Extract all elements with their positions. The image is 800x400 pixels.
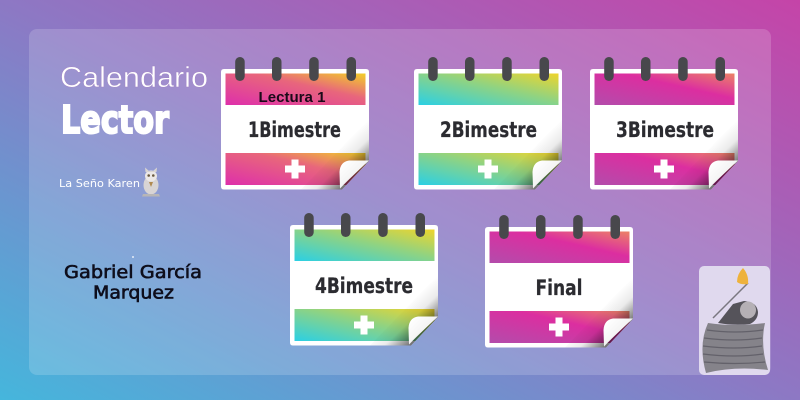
top band	[294, 230, 434, 261]
page curl	[532, 160, 562, 188]
page curl shadow	[565, 277, 633, 348]
binding rings	[235, 57, 356, 81]
name line 1: Gabriel García	[64, 263, 202, 283]
reader figure	[718, 301, 758, 325]
page curl shadow	[494, 119, 562, 190]
icon: owl	[142, 168, 160, 196]
page	[221, 69, 369, 190]
calendar: 4Bimestre	[290, 213, 438, 346]
author name: Gabriel García Marquez	[64, 263, 202, 304]
page curl	[708, 160, 738, 188]
credit text: La Seño Karen	[59, 178, 140, 190]
bottom band	[594, 153, 734, 185]
heading line: Lector: Lector	[61, 98, 169, 142]
icon: plus	[478, 160, 498, 178]
illustration card: reader inside book with butterfly	[699, 266, 770, 375]
label: 1Bimestre: 1Bimestre	[248, 118, 341, 143]
binding rings	[304, 213, 425, 237]
page	[414, 69, 562, 190]
page curl shadow	[670, 119, 738, 190]
page curl	[604, 318, 633, 346]
author credit with owl	[59, 168, 160, 196]
top band	[490, 232, 630, 263]
top band	[418, 74, 558, 105]
page	[590, 69, 738, 190]
bottom band	[294, 309, 434, 341]
page curl	[340, 160, 369, 188]
name line 2: Marquez	[93, 284, 174, 304]
label: Final: Final	[536, 276, 582, 301]
page curl shadow	[370, 275, 438, 346]
bottom band	[490, 311, 630, 343]
butterfly	[737, 268, 748, 284]
calendar: Final	[485, 215, 633, 348]
top band	[226, 74, 366, 105]
bottom band	[226, 153, 366, 185]
bottom band	[418, 153, 558, 185]
heading line: Calendario: Calendario	[60, 62, 208, 94]
binding rings	[604, 57, 725, 81]
calendar: 3Bimestre	[590, 57, 738, 190]
top band	[594, 74, 734, 105]
band label: Lectura 1: Lectura 1	[258, 90, 326, 106]
page	[290, 225, 438, 346]
page	[485, 227, 633, 348]
decorative dot	[132, 256, 134, 258]
card background	[699, 266, 770, 375]
page curl	[408, 316, 438, 344]
page curl shadow	[301, 119, 369, 190]
calendar: 2Bimestre	[414, 57, 562, 190]
icon: plus	[285, 160, 305, 178]
icon: plus	[549, 318, 569, 336]
binding rings	[428, 57, 549, 81]
binding rings	[499, 215, 620, 239]
heading: Calendario Lector	[60, 62, 208, 142]
fishing rod	[713, 283, 748, 318]
label: 3Bimestre: 3Bimestre	[616, 118, 714, 143]
label: 4Bimestre: 4Bimestre	[315, 274, 413, 299]
icon: plus	[354, 316, 374, 334]
label: 2Bimestre: 2Bimestre	[440, 118, 537, 143]
icon: plus	[654, 160, 674, 178]
book body	[702, 323, 768, 373]
calendar: 1Bimestre	[221, 57, 369, 190]
